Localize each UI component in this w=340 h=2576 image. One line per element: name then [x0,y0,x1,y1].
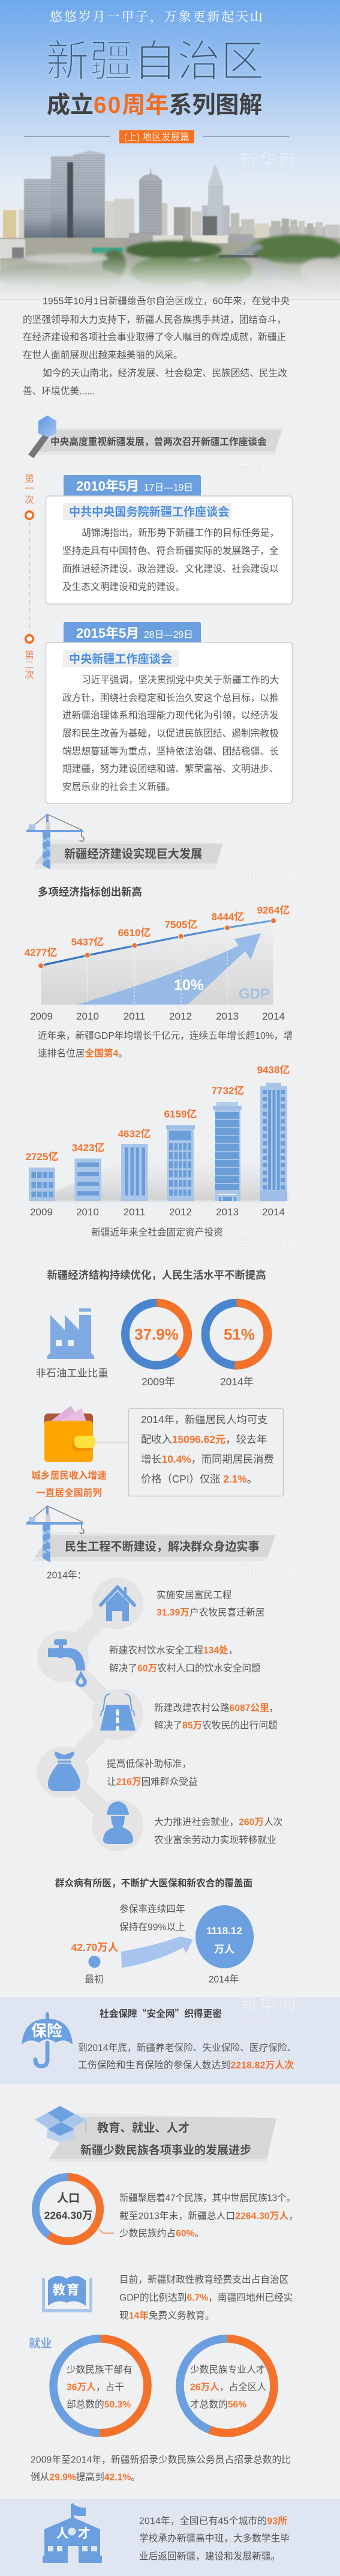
years: 2012 [169,1011,192,1022]
icon: road [100,1694,136,1731]
date tab [64,475,201,497]
participation note [119,1904,185,1933]
donut: cadres: 36万人，占干 [67,2382,124,2393]
GDP note: 速排名位居全国第4。 [38,1048,128,1059]
population text: 新疆聚居着47个民族，其中世居民族13个。 [119,2193,296,2204]
factory chimney cap [79,1308,91,1311]
chapter tag: (上) 地区发展篇 [124,132,189,142]
heading text: 民生工程不断建设，解决群众身边实事 [65,1540,260,1553]
initial label: 最初 [85,1974,104,1985]
year label: 2014年： [47,1570,86,1581]
employment label: 就业 [29,2336,52,2350]
card text: 期建疆，努力建设团结和谐、繁荣富裕、文明进步、 [62,763,279,775]
main title: 新疆自治区 [46,37,264,86]
donut: 2014 [205,1303,267,1388]
label: second [25,650,34,680]
intro text: 的坚强领导和大力支持下，新疆人民各族携手共进，团结奋斗， [23,314,286,325]
education text: GDP的比例达到6.7%，南疆四地州已经实 [119,2293,293,2303]
watermark: 新华网 [240,461,299,480]
item: subsistence allowance [37,1746,198,1798]
big value [206,1925,242,1955]
population text [119,2193,298,2239]
card text: 政方针，围绕社会稳定和长治久安这个总目标，以推 [62,692,279,703]
investment values: 9438亿 [257,1065,290,1076]
GDP points [38,918,276,969]
card text: 展和民生改善为基础，以促进民族团结、遏制宗教极 [62,728,279,739]
date tab: 2015年5月 [76,626,139,641]
icon: crane [26,1506,84,1562]
GDP note: 近年来，新疆GDP年均增长千亿元，连续五年增长超10%，增 [38,1030,293,1041]
watermark: WWW.NEWS.CN [240,2016,289,2023]
donut: cadres: 部总数的50.3% [67,2399,131,2410]
text [78,2043,296,2071]
panel: income [128,1409,283,1496]
card title [63,650,179,667]
watermark [240,1995,299,2023]
GDP values: 4277亿 [25,947,57,958]
bar chart: fixed-asset investment [26,1065,290,1238]
text: 到2014年底，新疆养老保险、失业保险、医疗保险、 [78,2043,296,2054]
trees and roads [0,235,340,297]
item: housing [92,1577,264,1629]
item: subsistence allowance: 提高低保补助标准， [107,1758,191,1769]
donut: professionals: 才总数的56% [190,2399,246,2410]
sky background [0,0,340,240]
chart caption: 新疆近年来全社会固定资产投资 [91,1227,223,1238]
subtitle divider left [24,136,110,137]
card title: 中共中央国务院新疆工作座谈会 [69,505,229,519]
GDP values: 7505亿 [165,919,197,930]
panel: first conference [46,475,293,604]
years: 2013 [216,1206,239,1218]
watermark: 新华网 [240,1995,299,2013]
label: second: 次 [25,670,34,680]
label: second: 二 [25,661,34,671]
watermark [240,1562,299,1589]
timeline node 2 [26,635,33,642]
intro text: 在世人面前展现出越来越美丽的风采。 [23,349,183,360]
intro text: 善、环境优美...... [23,385,95,396]
population connector [99,2230,114,2233]
item: employment [92,1800,283,1851]
hero header [0,0,340,299]
icon: pin [28,416,56,458]
heading: medical: 群众病有所医，不断扩大医保和新农合的覆盖面 [55,1877,252,1888]
drop lines [41,924,273,1005]
big value: 1118.12 [206,1925,242,1937]
population text: 少数民族约占60%。 [119,2228,204,2239]
item: drinking water: 解决了60万农村人口的饮水安全问题 [109,1663,261,1673]
year label: 2014年 [209,1974,239,1985]
tagline: 悠悠岁月一甲子，万象更新起天山 [50,7,264,25]
civil servants text: 例从29.9%提高到42.1%。 [31,2472,140,2483]
item: roads [92,1689,278,1740]
label: first [25,474,34,506]
donut: 2009: 37.9% [134,1325,179,1343]
heading text: 新疆经济建设实现巨大发展 [64,847,202,861]
ribbon [33,839,223,869]
intro text [23,296,290,396]
icon: school: 才 [78,2527,90,2541]
photo fade [0,255,340,299]
donut: 2009 [125,1303,188,1388]
years: 2014 [262,1206,285,1218]
label: second: 第 [25,650,34,661]
arrow: growth [77,933,261,1005]
panel: income: 配收入15096.62元，较去年 [141,1433,267,1445]
donut: 2009: 2009年 [142,1376,175,1388]
connectors [63,1603,118,1825]
wallet caption [31,1469,107,1499]
years: 2011 [124,1011,145,1022]
label: first: 一 [25,484,34,494]
investment values: 2725亿 [26,1151,58,1163]
initial value: 42.70万人 [71,1941,119,1953]
donut: population: 人口 [57,2192,80,2205]
area under line [41,921,273,1005]
donut: professionals: 少数民族专业人才 [190,2364,265,2375]
years: 2013 [216,1011,239,1022]
years: 2012 [169,1206,192,1218]
heading: 社会保障“安全网”织得更密 [100,2006,222,2020]
panel: second conference [46,622,293,803]
date tab: 28日—29日 [144,630,193,640]
GDP values: 8444亿 [212,911,244,922]
wallet caption: 一直居全国前列 [36,1487,102,1499]
donut: population: 2264.30万 [44,2210,92,2222]
text: 2014年，全国已有45个城市的93所 [139,2515,287,2526]
section heading: conferences [28,416,283,458]
panel: income: 2014年，新疆居民人均可支 [141,1413,267,1426]
icon: tap [48,1639,87,1687]
watermark: WWW.NEWS.CN [240,172,289,180]
years: 2010 [76,1011,99,1022]
watermark [240,461,299,489]
intro text: 1955年10月1日新疆维吾尔自治区成立，60年来，在党中央 [43,296,290,307]
bar 2013 [213,1102,242,1201]
education text: 现14年免费义务教育。 [119,2309,215,2321]
icon: house [101,1587,134,1621]
watermark: 新华网 [240,1562,299,1580]
investment values: 3423亿 [72,1142,104,1153]
big value: 万人 [214,1944,234,1955]
watermark: 新华网 [240,866,299,884]
icon: factory [47,1315,94,1359]
watermark: WWW.NEWS.CN [240,1255,289,1262]
icon: book: 教育 [52,2282,81,2297]
icon: worker [103,1801,133,1844]
small circle [89,1956,101,1968]
item: employment: 大力推进社会就业，260万人次 [154,1817,283,1828]
donut: 2014: 2014年 [220,1376,254,1388]
investment values [26,1065,290,1163]
label: first: 第 [25,474,34,485]
bar 2010 [74,1159,101,1201]
card title: 中央新疆工作座谈会 [69,652,172,666]
years: 2009 [30,1011,53,1022]
arrow: growth [121,1937,193,1968]
item: subsistence allowance: 让216万困难群众受益 [107,1776,198,1787]
towers [24,179,51,239]
card text: 进新疆治理体系和治理能力现代化为引领，以经济发 [62,710,279,721]
civil servants text [31,2455,291,2483]
subtitle: 成立60周年系列图解 [47,92,262,118]
card text: 安居乐业的社会主义新疆。 [62,782,175,793]
GDP values: 5437亿 [71,936,104,948]
card text: 胡锦涛指出，新形势下新疆工作的目标任务是， [82,527,279,538]
investment values: 6159亿 [164,1108,197,1120]
GDP values [25,904,290,958]
wallet caption: 城乡居民收入增速 [31,1469,107,1481]
ribbon [33,1532,275,1561]
card text [62,674,279,793]
card text: 面推进经济建设、政治建设、文化建设、社会建设以 [62,563,279,574]
label: first: 次 [25,495,34,506]
population text: 截至2013年末，新疆总人口2264.30万人， [119,2211,298,2222]
heading line 1: 教育、就业、人才 [97,2121,189,2135]
GDP line [41,921,273,966]
item: roads: 新建改建农村公路6087公里， [154,1703,278,1714]
years [30,1011,285,1022]
big circle [195,1905,254,1968]
timeline dashes [29,522,30,633]
icon: school [43,2503,102,2563]
education text: 目前，新疆财政性教育经费支出占自治区 [119,2275,288,2285]
section heading: livelihood [26,1506,275,1562]
participation note: 保持在99%以上 [119,1922,185,1933]
timeline [25,474,34,680]
bar 2014 [260,1083,287,1201]
factory label: 非石油工业比重 [36,1367,108,1379]
city skyline photo [0,151,340,299]
item: roads: 解决了85万农牧民的出行问题 [154,1720,278,1731]
watermark [240,1235,299,1262]
watermark: WWW.NEWS.CN [240,887,289,894]
lower buildings [0,238,340,265]
participation note: 参保率连续四年 [119,1904,185,1915]
ground shade [29,1147,288,1201]
icon: book [42,2276,92,2312]
heading text: 中央高度重视新疆发展，曾两次召开新疆工作座谈会 [50,436,267,447]
line chart: GDP [25,904,290,1022]
watermark: 新华网 [240,151,299,170]
panel: income: 价格（CPI）仅涨 2.1%。 [141,1473,257,1485]
icon: money bag [48,1752,80,1791]
bar 2009 [29,1167,55,1201]
investment values: 4632亿 [118,1128,151,1140]
card [46,496,293,604]
panel: social security [0,1997,340,2084]
text: 工伤保险和生育保险的参保人数达到2218.82万人次 [78,2060,294,2071]
item: housing: 31.39万户农牧民喜迁新居 [157,1607,264,1618]
investment values: 7732亿 [212,1085,244,1096]
donut: professionals [180,2339,274,2433]
chapter tag [119,130,194,143]
education text [119,2275,293,2321]
text [139,2515,290,2562]
heading: structure: 新疆经济结构持续优化，人民生活水平不断提高 [47,1269,266,1281]
text: 学校承办新疆高中班，大多数学生毕 [139,2533,290,2544]
item: drinking water: 新建农村饮水安全工程134处， [109,1645,237,1656]
text: 业后返回新疆，建设和发展新疆。 [139,2551,280,2562]
watermark [240,151,299,180]
section heading: minorities [35,2106,276,2162]
watermark: WWW.NEWS.CN [240,482,289,489]
icon: crane [26,814,84,869]
donut: cadres: 少数民族干部有 [67,2364,133,2375]
intro text: 在经济建设和各项社会事业取得了令人瞩目的辉煌成就，新疆正 [23,332,286,343]
card [46,642,293,803]
GDP note [38,1030,293,1059]
icon: umbrella: 保险 [31,2022,62,2040]
years: 2014 [262,1011,285,1022]
card text: 及生态文明建设和党的建设。 [62,581,185,592]
timeline node 1 [26,512,33,519]
donut: professionals: 26万人，占全区人 [190,2382,267,2393]
ribbon [37,428,283,455]
civil servants text: 2009年至2014年，新疆新招录少数民族公务员占招录总数的比 [31,2455,291,2466]
bar 2012 [166,1125,195,1201]
item: employment: 农业富余劳动力实现转移就业 [154,1834,276,1846]
item: housing: 实施安居富民工程 [157,1589,232,1600]
date tab: 2010年5月 [76,479,139,494]
watermark: 新华网 [240,1235,299,1253]
watermark [240,866,299,894]
GDP label: GDP [239,986,270,1002]
subtitle divider right [203,136,289,137]
panel: talent [0,2499,340,2576]
date tab [64,622,201,643]
flow of livelihood projects [37,1577,283,1851]
donut: population [36,2177,100,2241]
years: 2009 [30,1206,53,1218]
icon: wallet [44,1406,95,1462]
section heading: economy [26,814,223,869]
growth value: 10% [174,977,204,994]
card text: 坚持走具有中国特色、符合新疆实际的发展路子，全 [62,545,279,556]
card text: 习近平强调，坚决贯彻党中央关于新疆工作的大 [82,674,279,685]
item: drinking water [37,1631,261,1687]
GDP values: 6610亿 [118,927,151,939]
icon: school: 人 [56,2527,68,2541]
card text: 端思想蔓延等为重点，坚持依法治疆、团结稳疆、长 [62,746,279,757]
icon: umbrella [22,2012,73,2066]
icon: graduation cap [35,2106,86,2142]
watermark: WWW.NEWS.CN [240,1582,289,1589]
medical insurance chart [71,1904,254,1985]
card text [62,527,279,592]
panel: income: 增长10.4%，而同期居民消费 [141,1453,274,1465]
donut: 2014: 51% [224,1325,255,1343]
GDP values: 9264亿 [257,904,290,916]
ribbon [49,2113,276,2162]
bar 2011 [121,1144,148,1201]
intro text: 如今的天山南北，经济发展、社会稳定、民族团结、民生改 [43,367,287,378]
years [30,1206,285,1218]
heading line 2: 新疆少数民族各项事业的发展进步 [80,2143,251,2157]
years: 2011 [124,1206,145,1218]
years: 2010 [76,1206,99,1218]
factory windows [56,1340,74,1346]
date tab: 17日—19日 [144,483,193,493]
donut: cadres [53,2339,148,2433]
chart heading: 多项经济指标创出新高 [38,886,142,898]
